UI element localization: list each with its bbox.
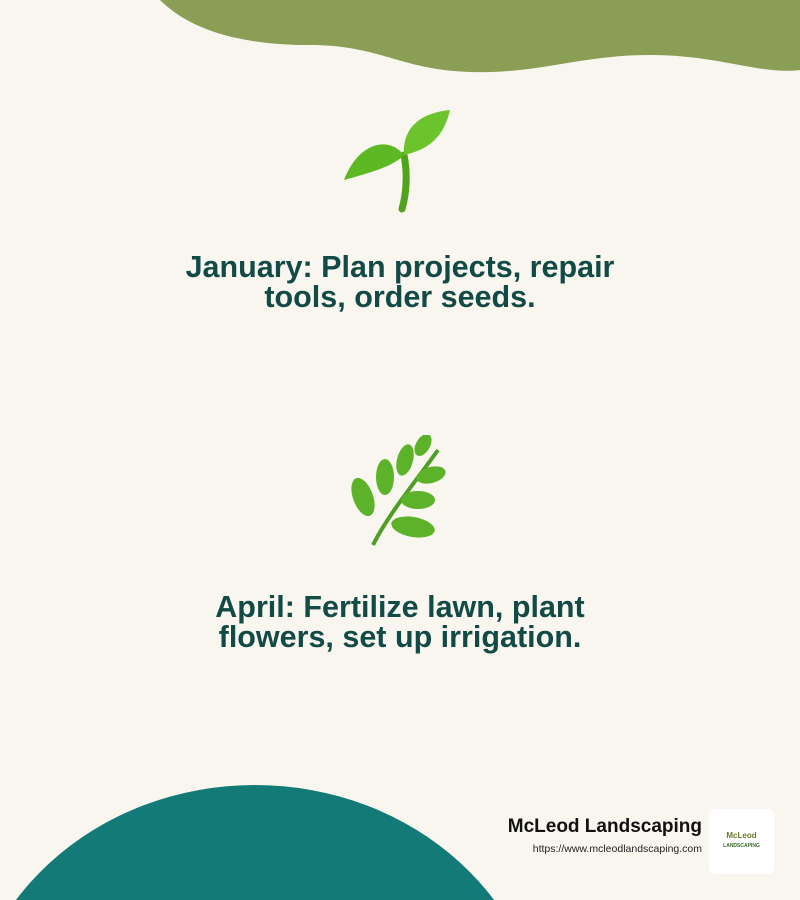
- text: January: [186, 250, 614, 314]
- logo: McLeod: [726, 831, 757, 840]
- text: January: January: Plan projects, repair: [186, 250, 614, 284]
- logo: LANDSCAPING: [723, 843, 760, 849]
- text: January: tools, order seeds.: [264, 280, 536, 314]
- bottom teal circle: [16, 785, 494, 900]
- brand block: McLeod Landscaping: [508, 816, 702, 837]
- logo: [709, 809, 774, 874]
- brand block: https://www.mcleodlandscaping.com: [533, 843, 702, 855]
- top wave shape: [160, 0, 800, 72]
- icon: seedling: [344, 110, 450, 212]
- text: April: April: Fertilize lawn, plant: [215, 590, 585, 624]
- icon: herb: [351, 435, 446, 546]
- brand block: [508, 816, 702, 855]
- text: April: [215, 590, 585, 654]
- text: April: flowers, set up irrigation.: [219, 620, 581, 654]
